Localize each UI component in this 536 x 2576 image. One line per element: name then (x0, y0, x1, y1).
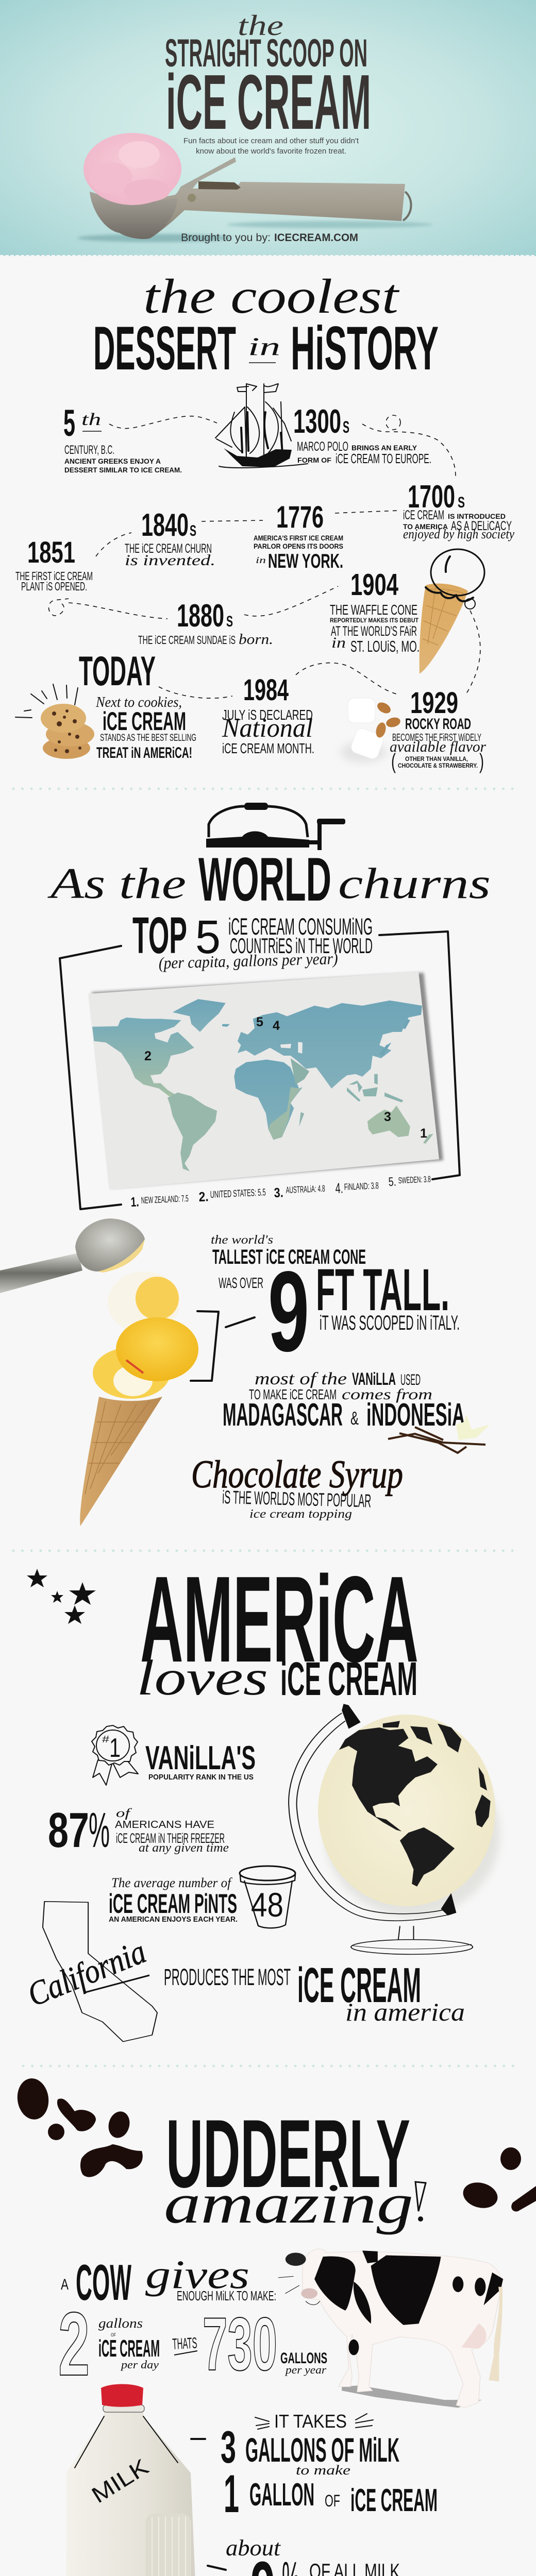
icon: ice cream scoop tool (77, 133, 433, 242)
illustration: ice cream globe (289, 1704, 500, 1954)
photo: steel scoop (0, 1218, 145, 1293)
fact: vanilla origin: USED (400, 1371, 421, 1388)
event: 1776: in (256, 555, 266, 565)
fact: three gallons: IT TAKES (274, 2411, 347, 2432)
fact: cow gives: ENOUGH MiLK TO MAKE: (177, 2288, 276, 2303)
event: 5th century BC: 5 (63, 402, 75, 444)
event: 5th century BC: CENTURY, B.C. (64, 443, 114, 457)
icon: number one ribbon: 1 (109, 1733, 121, 1763)
legend: country rankings: 1. (130, 1194, 139, 1210)
fact: california: California (22, 1933, 151, 2014)
fact: cow gives: GALLONS (280, 2350, 327, 2367)
fact: cow gives: iCE CREAM (98, 2335, 160, 2362)
event: today: TREAT iN AMERiCA! (96, 744, 192, 761)
heading: udderly amazing (164, 2099, 426, 2235)
fact: 87 percent: iCE CREAM iN THEiR FREEZER (116, 1831, 225, 1846)
panel: as the world churns (0, 803, 513, 1552)
fact: california: in america (345, 1997, 465, 2026)
map rank numbers: 2 (144, 1049, 152, 1063)
icon: pint cup: 48 (251, 1886, 283, 1924)
event: 1776 (254, 500, 343, 572)
heading: as the world churns: As the (47, 859, 186, 908)
event: 1851 (15, 536, 93, 593)
fact: vanilla origin: & (350, 1408, 359, 1429)
fact: 87 percent: AMERICANS HAVE (115, 1819, 214, 1831)
map continents (92, 999, 433, 1171)
heading: the coolest dessert in history: DESSERT (93, 314, 236, 383)
event: 1300s: iCE CREAM TO EUROPE. (336, 451, 431, 466)
bracket frame (60, 931, 460, 1209)
fact: california: PRODUCES THE MOST (164, 1964, 291, 1990)
event: 1700s: iCE CREAM (403, 508, 444, 522)
title: the (238, 10, 283, 42)
fact: chocolate syrup (191, 1453, 403, 1521)
timeline dashed path (48, 415, 480, 698)
fact: 87 percent: % (89, 1803, 110, 1858)
event: 1904 (330, 568, 420, 655)
event: today: Next to cookies, (95, 694, 182, 710)
brought to you by: Brought to you by: (181, 232, 271, 244)
fact: vanilla rank: POPULARITY RANK IN THE US (148, 1773, 254, 1782)
event: 1700s: enjoyed by high society (403, 527, 514, 541)
icon: pint cup (240, 1866, 295, 1928)
fact: 87 percent: 87 (48, 1803, 89, 1858)
heading: as the world churns: WORLD (198, 845, 331, 914)
fact: cow gives: A (61, 2276, 69, 2293)
fact: tallest cone: the world's (211, 1233, 273, 1247)
subtitle (183, 137, 359, 156)
icon: stars (27, 1569, 96, 1624)
fact: vanilla rank (92, 1725, 256, 1785)
event: today: STANDS AS THE BEST SELLING (100, 733, 196, 743)
subtitle: know about the world's favorite frozen treat. (196, 147, 346, 156)
title (165, 10, 371, 145)
photo: triple scoop cone (80, 1272, 198, 1526)
fact: 87 percent (48, 1803, 229, 1858)
event: 1840s: is invented. (125, 552, 215, 569)
fact: cow gives (58, 2252, 327, 2395)
fact: vanilla rank: VANiLLA'S (145, 1739, 256, 1776)
event: 1984: National (222, 714, 313, 743)
icon: california state outline (43, 1902, 157, 2042)
event: 1984: 1984 (243, 673, 289, 707)
event: 1904: ST. LOUiS, MO. (350, 637, 420, 655)
fact: tallest cone: TALLEST iCE CREAM CONE (212, 1246, 366, 1268)
fact: three gallons: 3 (221, 2421, 236, 2472)
panel: as the world churns: COUNTRiES iN THE WORLD (230, 934, 373, 958)
legend: country rankings: AUSTRALiA: 4.8 (286, 1183, 325, 1195)
fact: chocolate syrup: Chocolate Syrup (191, 1453, 403, 1496)
fact: cow gives: per year (284, 2363, 326, 2376)
heading: the coolest dessert in history (93, 269, 439, 383)
legend: country rankings: SWEDEN: 3.8 (398, 1174, 431, 1185)
fact: three gallons: 1 (224, 2464, 239, 2524)
photo: milk jug (66, 2384, 196, 2576)
icon: chocolate syrup drops (15, 2076, 536, 2212)
fact: three gallons: GALLON (249, 2477, 314, 2513)
event: 1929 (390, 686, 486, 773)
fact: vanilla origin: MADAGASCAR (223, 1397, 343, 1433)
panel: udderly amazing (18, 2078, 536, 2576)
heading: top 5 countries: TOP (132, 907, 187, 964)
map rank numbers: 3 (384, 1110, 391, 1124)
heading: america loves ice cream: loves (137, 1650, 268, 1706)
event: 1700s (403, 479, 514, 541)
event: 1776: AMERICA'S FIRST ICE CREAM (254, 534, 343, 542)
event: 1300s: S (343, 418, 349, 436)
fact: three gallons: to make (296, 2463, 350, 2478)
event: today: TODAY (79, 648, 156, 694)
heading: top 5 countries: 5 (195, 911, 221, 963)
brought to you by: ICECREAM.COM (274, 232, 358, 244)
fact: vanilla origin (223, 1369, 465, 1433)
event: 1929: ROCKY ROAD (405, 716, 471, 733)
photo: holstein cow (279, 2249, 503, 2408)
legend: country rankings (130, 1174, 431, 1210)
fact: cow gives: COW (76, 2254, 131, 2311)
event: 1880s: S (226, 613, 233, 630)
fact: nine percent (208, 2535, 478, 2576)
event: 1840s: S (190, 522, 196, 539)
event: 1300s: MARCO POLO (297, 439, 348, 454)
event: 1929: ) (479, 749, 484, 773)
fact: vanilla origin: VANiLLA (352, 1369, 396, 1389)
event: today (79, 648, 196, 761)
event: 1840s (125, 507, 215, 569)
event: 1929: available flavor (390, 738, 486, 755)
event: 1984: JULY iS DECLARED (222, 707, 313, 723)
heading: as the world churns: churns (338, 859, 491, 908)
event: 1904: 1904 (350, 568, 398, 602)
event: today: iCE CREAM (103, 707, 186, 736)
fact: cow gives: gives (145, 2252, 249, 2297)
panel: udderly amazing: iCE CREAM (350, 2483, 438, 2518)
fact: 48 pints (109, 1866, 295, 1928)
event: 5th century BC: th (81, 410, 101, 429)
event: 1300s: 1300 (293, 402, 341, 440)
legend: country rankings: NEW ZEALAND: 7.5 (141, 1193, 189, 1206)
fact: 48 pints: iCE CREAM PiNTS (109, 1889, 237, 1919)
event: 1300s: BRINGS AN EARLY (351, 444, 417, 452)
heading: udderly amazing: amazing (164, 2172, 413, 2235)
legend: country rankings: 4. (335, 1180, 343, 1196)
legend: country rankings: 2. (198, 1189, 209, 1205)
event: 1904: AT THE WORLD'S FAiR (331, 623, 417, 639)
event: 1929: OTHER THAN VANILLA, (405, 755, 468, 762)
heading: the coolest dessert in history: in (248, 332, 280, 361)
fact: cow gives: gallons (98, 2316, 143, 2331)
event: 1851: 1851 (27, 536, 75, 569)
event: 1700s: IS INTRODUCED (448, 512, 506, 520)
icon: churn crank (206, 803, 345, 850)
fact: vanilla origin: TO MAKE iCE CREAM (249, 1386, 337, 1402)
event: 1840s: THE iCE CREAM CHURN (125, 541, 212, 556)
map rank numbers: 4 (273, 1019, 280, 1033)
event: 1929: ( (391, 749, 396, 773)
event: 1904: THE WAFFLE CONE (330, 602, 417, 618)
panel: header (0, 0, 536, 256)
fact: 87 percent: at any given time (139, 1841, 229, 1855)
fact: three gallons (191, 2411, 438, 2524)
icon: cookies (15, 684, 94, 759)
fact: vanilla origin: most of the (255, 1369, 347, 1388)
event: 1880s: THE iCE CREAM SUNDAE iS (138, 633, 236, 647)
panel: america loves ice cream (22, 1556, 514, 2067)
event: 5th century BC: DESSERT SIMILAR TO ICE CREAM. (64, 466, 182, 474)
fact: cow gives: 730 (203, 2302, 277, 2386)
subtitle: Fun facts about ice cream and other stuff you didn't (183, 137, 359, 145)
fact: cow gives: per day (120, 2358, 159, 2371)
event: 1904: in (331, 634, 346, 651)
event: 1840s: 1840 (141, 507, 189, 543)
icon: sailing ship (215, 384, 308, 468)
event: 1851: THE FiRST iCE CREAM (15, 569, 93, 583)
map rank numbers: 1 (420, 1126, 427, 1141)
event: 5th century BC (63, 402, 182, 474)
fact: 48 pints: The average number of (111, 1875, 233, 1890)
icon: number one ribbon: # (102, 1734, 109, 1744)
event: 1776: 1776 (276, 500, 324, 534)
event: 1300s: FORM OF (297, 456, 331, 464)
fact: cow gives: 2 (58, 2294, 90, 2395)
heading: as the world churns (47, 845, 491, 914)
heading: america loves ice cream (137, 1551, 418, 1706)
event: 1300s (293, 402, 431, 466)
fact: nine percent: about (226, 2535, 281, 2561)
event: 1880s (138, 598, 273, 648)
event: 1984: iCE CREAM MONTH. (222, 740, 314, 756)
heading: top 5 countries: iCE CREAM CONSUMiNG (228, 913, 373, 940)
legend: country rankings: FiNLAND: 3.8 (344, 1180, 379, 1192)
fact: tallest cone: 9 (268, 1248, 309, 1376)
event: 1700s: S (458, 494, 465, 511)
bracket callout (191, 1311, 255, 1381)
event: 1929: CHOCOLATE & STRAWBERRY. (398, 762, 478, 769)
icon: vanilla pods and flower (388, 1414, 490, 1453)
fact: vanilla origin: comes from (342, 1386, 432, 1403)
event: 1776: NEW YORK. (268, 550, 343, 572)
event: 1880s: born. (239, 632, 273, 648)
map rank numbers: 5 (256, 1015, 263, 1029)
event: 1776: PARLOR OPENS ITS DOORS (254, 542, 343, 550)
event: 1700s: TO AMERICA (403, 522, 448, 531)
world map card (88, 972, 443, 1190)
fact: chocolate syrup: ice cream topping (249, 1507, 352, 1521)
event: 5th century BC: ANCIENT GREEKS ENJOY A (64, 457, 161, 465)
icon: waffle cone with drawn scoop (420, 549, 484, 674)
event: 1929: 1929 (410, 686, 458, 720)
fact: cow gives: OF (111, 2332, 116, 2337)
map rank numbers (144, 1015, 427, 1141)
fact: three gallons: OF (325, 2492, 340, 2510)
event: 1984 (222, 673, 314, 756)
fact: 87 percent: of (116, 1807, 132, 1820)
fact: 48 pints: AN AMERICAN ENJOYS EACH YEAR. (109, 1915, 238, 1924)
legend: country rankings: 3. (274, 1184, 283, 1200)
event: 1929: BECOMES THE FiRST WiDELY (392, 732, 481, 743)
legend: country rankings: UNITED STATES: 5.5 (210, 1187, 266, 1200)
event: 1904: REPORTEDLY MAKES ITS DEBUT (330, 617, 419, 624)
heading: top 5 countries (132, 907, 373, 972)
event: 1851: PLANT iS OPENED. (21, 580, 87, 593)
event: 1880s: 1880 (177, 598, 224, 634)
fact: california (22, 1902, 465, 2042)
photo: milk jug: MILK (87, 2454, 153, 2508)
heading: top 5 countries: (per capita, gallons per year) (158, 949, 338, 972)
legend: country rankings: 5. (388, 1175, 396, 1189)
icon: number one ribbon (92, 1725, 138, 1785)
panel: history timeline (12, 269, 514, 790)
fact: tallest cone: WAS OVER (219, 1275, 263, 1292)
fact: cow gives: THATS (172, 2335, 197, 2353)
heading: the coolest dessert in history: the coolest (143, 269, 400, 324)
brought to you by (181, 232, 358, 244)
fact: tallest cone (211, 1233, 460, 1376)
globe continents (339, 1721, 491, 1887)
fact: chocolate syrup: iS THE WORLDS MOST POPULAR (222, 1486, 372, 1512)
icon: marshmallows and almonds (340, 698, 401, 762)
event: 1700s: 1700 (408, 479, 455, 515)
